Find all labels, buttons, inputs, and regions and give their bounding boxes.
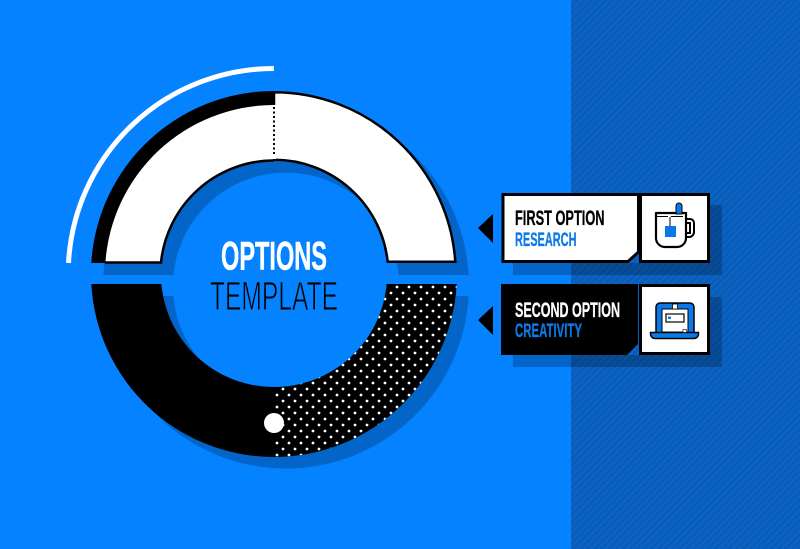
label: research: RESEARCH [515, 230, 576, 251]
segment: top right white [274, 92, 455, 262]
segment: bottom left black [91, 284, 274, 457]
card: first option [503, 194, 708, 262]
segment: bottom right dotted [274, 284, 457, 457]
icon panel [640, 194, 708, 262]
chart: options donut [91, 91, 457, 457]
marker: white dot [264, 413, 284, 433]
donut shadows [103, 102, 469, 469]
card shadows [513, 205, 722, 367]
text panel [501, 284, 638, 355]
cover: seam between top segments [272, 105, 276, 159]
title line: options: OPTIONS [221, 234, 327, 278]
divider: dotted line [273, 107, 275, 156]
outer white arc [68, 68, 274, 263]
card: second option [501, 284, 708, 355]
label: creativity: CREATIVITY [515, 321, 582, 342]
arrow: first option [478, 214, 493, 243]
title line: template: TEMPLATE [210, 273, 338, 319]
arrow: second option [478, 306, 493, 335]
segment: top left white with black band [91, 91, 274, 263]
icon: laptop [650, 303, 698, 338]
icon: mug with tea bag [656, 203, 694, 247]
icon panel [640, 286, 708, 354]
panel: striped right band [571, 0, 800, 549]
label: first option: FIRST OPTION [515, 207, 604, 230]
label: second option: SECOND OPTION [515, 299, 620, 322]
title [210, 234, 338, 319]
text panel [503, 194, 638, 262]
